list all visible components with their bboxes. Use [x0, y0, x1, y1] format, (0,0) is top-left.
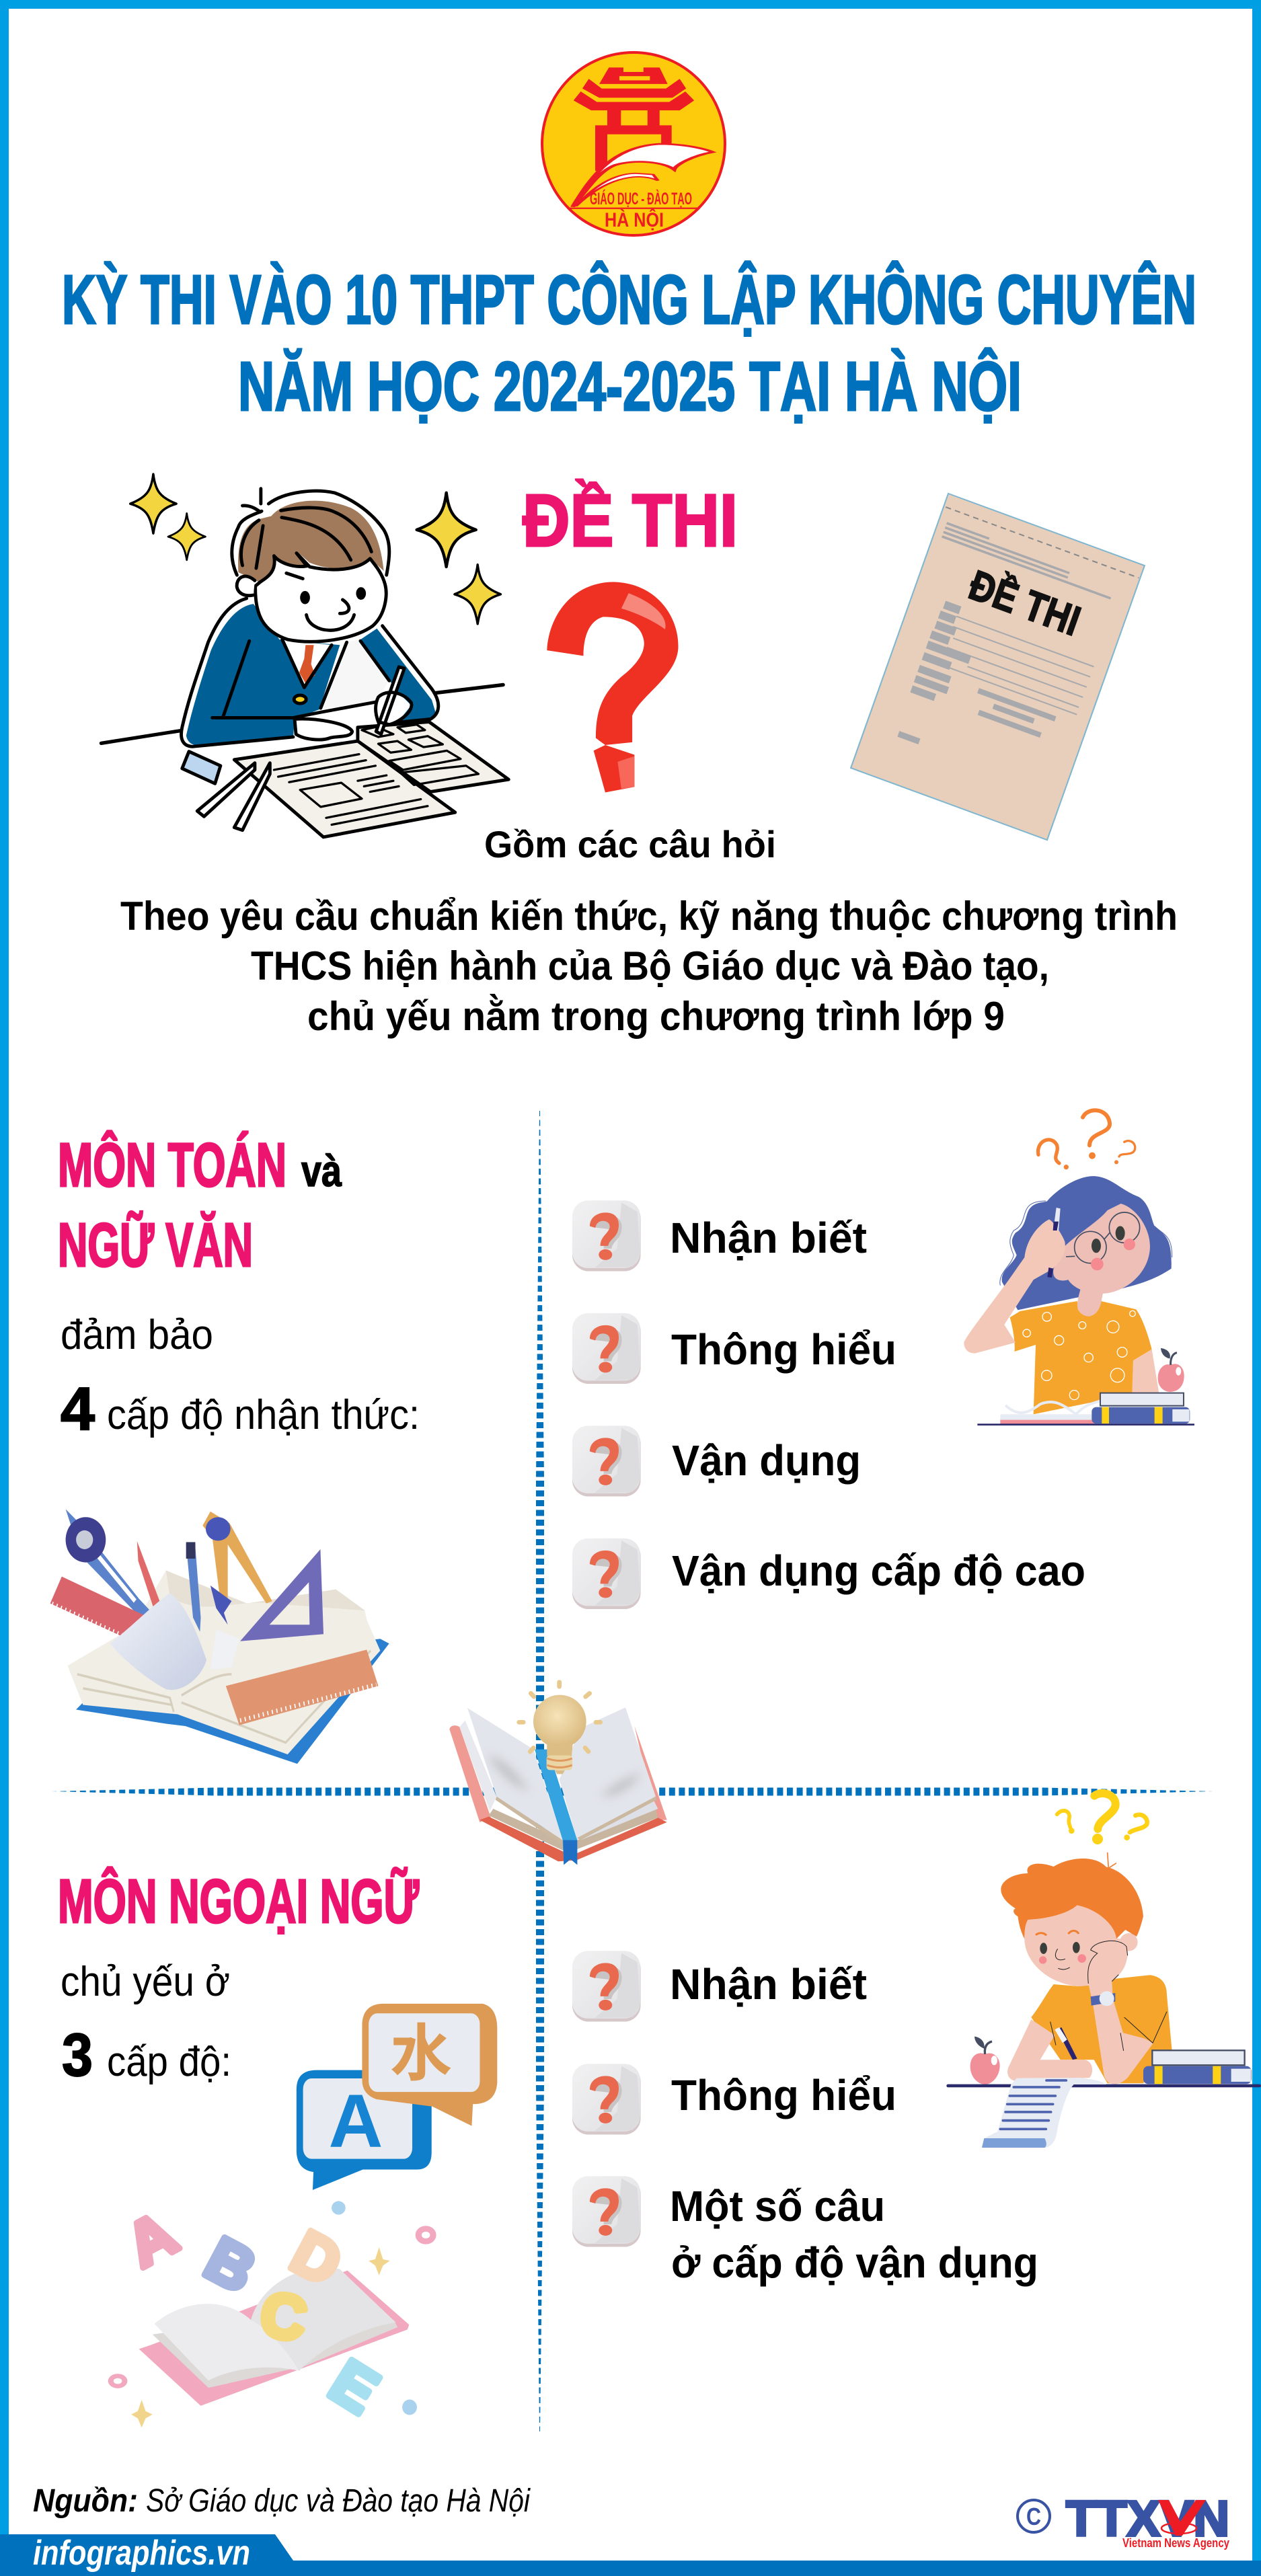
title	[62, 260, 1196, 425]
intro paragraph: THCS hiện hành của Bộ Giáo dục và Đào tạo,	[251, 943, 1049, 988]
illustration: open book with letters: A	[116, 2199, 188, 2280]
illustration: exam paper: ĐỀ THI	[963, 561, 1086, 645]
illustration: open book with letters: B	[194, 2224, 266, 2306]
section heading: math and literature: MÔN TOÁN	[58, 1130, 286, 1200]
text: four cognitive levels: đảm bảo	[61, 1312, 213, 1358]
source: Nguồn:	[33, 2483, 138, 2519]
section heading: math and literature: NGỮ VĂN	[58, 1210, 253, 1280]
agency logo: C	[1026, 2503, 1041, 2530]
item: mot so cau o cap do van dung	[572, 2176, 1038, 2287]
illustration: open book with letters: C	[256, 2279, 311, 2354]
icon: translation speech bubbles: A	[329, 2079, 383, 2163]
intro paragraph	[120, 894, 1178, 1039]
section heading: math and literature	[58, 1130, 342, 1280]
item: nhan biet: Nhận biết	[670, 1960, 867, 2008]
heading: de thi: ĐỀ THI	[523, 479, 738, 562]
illustration: boy thinking	[946, 1793, 1261, 2148]
item: nhan biet	[572, 1951, 867, 2022]
item: van dung cap do cao	[572, 1538, 1085, 1609]
source: Sở Giáo dục và Đào tạo Hà Nội	[146, 2483, 531, 2519]
item: nhan biet: Nhận biết	[670, 1214, 867, 1262]
text: four cognitive levels: cấp độ nhận thức:	[107, 1392, 420, 1438]
illustration: open book with letters: D	[280, 2218, 352, 2299]
icon: big red question mark	[547, 582, 678, 792]
illustration: open book with letters	[108, 2199, 436, 2427]
item: thong hieu: Thông hiểu	[671, 1325, 896, 1374]
agency logo: TTXVN	[1066, 2491, 1229, 2546]
logo: Hanoi education department: GIÁO DỤC - ĐÀO TẠO	[590, 189, 692, 208]
illustration: book with math tools	[50, 1509, 389, 1764]
illustration: book with light bulb	[449, 1682, 667, 1865]
subheading: Gồm các câu hỏi	[484, 823, 776, 865]
item: thong hieu: Thông hiểu	[671, 2071, 896, 2119]
section heading: foreign languages: MÔN NGOẠI NGỮ	[58, 1867, 419, 1936]
section heading: math and literature: và	[301, 1146, 342, 1196]
text: three levels: 3	[62, 2022, 93, 2089]
list: math and literature levels	[572, 1200, 1085, 1609]
item: van dung cap do cao: Vận dụng cấp độ cao	[672, 1547, 1085, 1595]
item: van dung: Vận dụng	[672, 1436, 861, 1485]
logo: Hanoi education department	[542, 52, 725, 235]
item: mot so cau o cap do van dung: ở cấp độ vận dụng	[671, 2238, 1038, 2287]
item: thong hieu	[572, 1313, 896, 1384]
item: van dung	[572, 1426, 861, 1497]
text: four cognitive levels	[61, 1312, 420, 1443]
text: three levels: cấp độ:	[107, 2039, 231, 2085]
intro paragraph: Theo yêu cầu chuẩn kiến thức, kỹ năng thuộc chương trình	[120, 894, 1178, 939]
list: foreign language levels	[572, 1951, 1038, 2287]
illustration: girl thinking	[964, 1110, 1194, 1426]
illustration: exam paper	[851, 494, 1145, 840]
text: three levels	[61, 1959, 231, 2089]
item: thong hieu	[572, 2064, 896, 2135]
item: nhan biet	[572, 1200, 867, 1272]
item: mot so cau o cap do van dung: Một số câu	[670, 2182, 885, 2230]
intro paragraph: chủ yếu nằm trong chương trình lớp 9	[307, 994, 1005, 1039]
site name: infographics.vn	[33, 2534, 250, 2573]
icon: translation speech bubbles	[297, 2004, 497, 2190]
footer band	[0, 2534, 1261, 2576]
text: three levels: chủ yếu ở	[61, 1959, 230, 2005]
source	[33, 2483, 531, 2519]
agency logo: Vietnam News Agency	[1122, 2536, 1229, 2550]
icon: translation speech bubbles: 水	[390, 2004, 452, 2093]
illustration: open book with letters: E	[318, 2347, 389, 2427]
text: four cognitive levels: 4	[61, 1376, 95, 1443]
illustration: student writing exam	[101, 474, 508, 837]
logo: Hanoi education department: HÀ NỘI	[605, 208, 664, 231]
